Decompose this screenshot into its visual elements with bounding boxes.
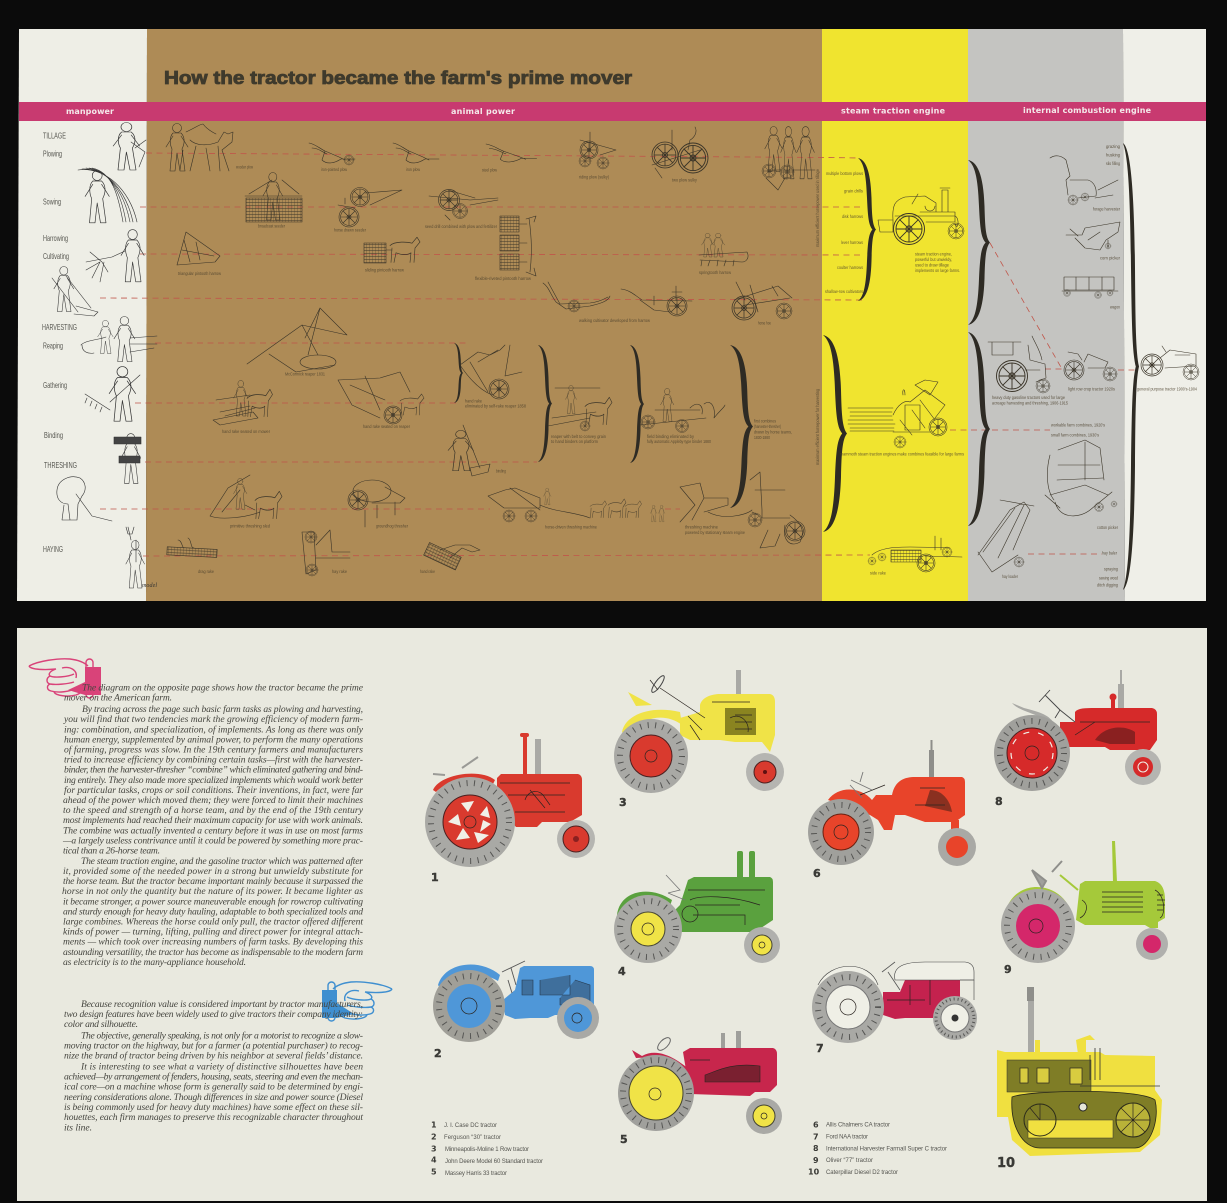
farm task labels: Binding	[44, 430, 63, 440]
row: haying machines	[167, 530, 480, 576]
legend: tractors 1 to 5: J. I. Case DC tractor	[444, 1123, 497, 1129]
steam traction engine	[878, 188, 964, 244]
implement captions: broadcast seeder	[258, 224, 285, 228]
era band	[19, 102, 1206, 121]
text block: diagram explanation: you will find that two tendencies mark the growing efficiency of modern farm-	[63, 714, 363, 725]
implement captions: multiple bottom plows	[826, 171, 864, 176]
farm task labels: HAYING	[43, 544, 63, 554]
legend: tractors 6 to 10: 8	[813, 1144, 819, 1153]
icon: blue pointing hand	[322, 982, 392, 1021]
era label: internal combustion engine: internal combustion engine	[1023, 106, 1152, 115]
text block: diagram explanation: it became stronger, a power source maneuverable enough for rowcrop cultivating	[63, 896, 363, 907]
legend: tractors 1 to 5: John Deere Model 60 Standard tractor	[445, 1159, 543, 1165]
panel: text and tractor page	[17, 628, 1207, 1201]
legend: tractors 1 to 5: Ferguson “30” tractor	[444, 1135, 501, 1141]
gasoline machines	[978, 156, 1199, 572]
implement captions: drawn by horse teams,	[754, 430, 792, 434]
text block: diagram explanation: The combine was actually invented a century before it was in use on most farms	[63, 825, 363, 836]
implement captions: binding	[496, 468, 506, 474]
farm task labels: TILLAGE	[43, 130, 66, 140]
implement captions	[178, 144, 1197, 588]
implement captions: spraying	[1104, 566, 1118, 572]
tractor 3: Minneapolis-Moline	[614, 670, 784, 809]
implement captions: acreage harvesting and threshing, 1906-1915	[992, 400, 1068, 406]
implement captions: mammoth steam traction engines make combines feasible for large farms	[840, 452, 965, 456]
legend: tractors 6 to 10: Caterpillar Diesel D2 tractor	[826, 1170, 898, 1176]
implement captions: horse-driven threshing machine	[545, 524, 597, 530]
text block: diagram explanation: human energy, supplemented by animal power, to perform the many operations	[64, 734, 363, 745]
tractor 10: Caterpillar D2	[997, 987, 1162, 1171]
text block: recognition value: two design features have been widely used to give tractors their company identity:	[64, 1009, 363, 1020]
text block: diagram explanation: large combines. Whereas the horse could only pull, the tractor offered different	[63, 916, 363, 928]
text block: diagram explanation: most implements had reached their maximum capacity for use with work animals.	[63, 815, 363, 826]
legend: tractors 6 to 10: 6	[813, 1120, 819, 1130]
legend: tractors 1 to 5: Massey Harris 33 tractor	[445, 1171, 507, 1177]
implement captions: horse hoe	[758, 320, 771, 326]
implement captions: maximum efficient horsepower for harvesting	[815, 389, 820, 465]
implement captions: hand rake seated on mower	[222, 429, 270, 434]
farm task labels	[42, 130, 77, 554]
implement captions: general purpose tractor 1900's-1904	[1137, 386, 1197, 392]
farm task labels: HARVESTING	[42, 322, 77, 332]
implement captions: implements on large farms.	[915, 268, 960, 273]
implement captions: used to draw tillage	[915, 262, 949, 268]
text block: diagram explanation: the horse team. But the tractor became important mainly because it surpassed the	[63, 876, 364, 887]
text block: recognition value: The objective, generally speaking, is not only for a motorist to recognize a slow-	[81, 1030, 363, 1042]
implement captions: coulter harrows	[837, 265, 864, 270]
text block: recognition value: nize the brand of tractor being driven by his neighbor at several fields’ distance.	[64, 1051, 363, 1062]
implement captions: powerful but unwieldy,	[915, 257, 952, 262]
implement captions: disk harrows	[842, 214, 864, 219]
legend: tractors 6 to 10: 10	[808, 1168, 820, 1176]
text block: diagram explanation: —a largely useless contrivance until it could be powered by something more prac-	[62, 835, 363, 846]
legend: tractors 6 to 10: 7	[813, 1132, 819, 1142]
implement captions: side rake	[870, 570, 886, 576]
text block: diagram explanation: kinds of power — turning, lifting, pulling and direct power for integral attach-	[63, 926, 363, 938]
implement captions: ditch digging	[1097, 582, 1118, 588]
text block: diagram explanation: as electricity is to the many-appliance household.	[63, 957, 246, 968]
farm task labels: Gathering	[43, 380, 67, 390]
column: animal power background	[146, 29, 822, 601]
mammoth combine	[848, 380, 947, 448]
text block: recognition value: color and silhouette.	[64, 1019, 138, 1030]
implement captions: horse drawn seeder	[334, 228, 366, 232]
implement captions: hand rake	[420, 569, 435, 574]
text block: diagram explanation	[62, 682, 364, 968]
number 7: 7	[816, 1042, 824, 1055]
column: internal combustion background	[968, 29, 1125, 601]
implement captions: wagon	[1110, 304, 1120, 310]
legend: tractors 6 to 10: International Harvester Farmall Super C tractor	[826, 1146, 947, 1152]
tractor 8: Farmall Super C	[994, 670, 1161, 808]
page background	[17, 628, 1207, 1201]
text block: diagram explanation: to the speed and strength of a horse team, and by the end of the 19th century	[63, 805, 364, 816]
text block: recognition value: its line.	[64, 1122, 92, 1133]
text block: diagram explanation: binder, then the harvester-thresher “combine” which eliminated gathering and bind-	[64, 765, 363, 776]
implement captions: steam traction engine,	[915, 252, 952, 256]
number 5: 5	[620, 1133, 628, 1146]
implement captions: groundhog thresher	[376, 524, 408, 528]
implement captions: workable farm combines, 1920's	[1051, 422, 1106, 428]
implement captions: walking cultivator developed from harrow	[579, 318, 651, 323]
implement captions: cotton picker	[1097, 525, 1118, 530]
text block: diagram explanation: for particular tasks, crops or soil conditions. Their inventions, in fact, were far	[64, 785, 363, 796]
row: sowing machines	[245, 172, 498, 227]
legend: tractors 6 to 10: Allis Chalmers CA tractor	[826, 1122, 890, 1128]
number 4: 4	[618, 965, 626, 978]
legend: tractors 6 to 10	[808, 1120, 947, 1176]
legend: tractors 1 to 5: 3	[431, 1144, 437, 1154]
farm task labels: THRESHING	[44, 460, 77, 470]
text block: recognition value: is being commonly used for heavy duty machines) have some effect on these sil-	[64, 1102, 363, 1113]
implement captions: small farm combines, 1930's	[1051, 432, 1100, 438]
era label: animal power: animal power	[451, 107, 515, 116]
implement captions: primitive threshing sled	[230, 524, 270, 528]
implement captions: riding plow (sulky)	[579, 174, 609, 180]
tractor 1: J. I. Case DC	[425, 733, 595, 884]
text block: diagram explanation: The steam traction engine, and the gasoline tractor which was patterned after	[81, 856, 363, 867]
text block: diagram explanation: ing entirely. They also made more specialized implements which would work better	[64, 775, 363, 786]
legend: tractors 6 to 10: Oliver “77” tractor	[826, 1158, 873, 1164]
legend: tractors 1 to 5: 1	[431, 1120, 437, 1130]
number 2: 2	[434, 1047, 442, 1060]
farm task labels: Plowing	[43, 148, 62, 158]
column: right margin background	[1123, 29, 1206, 601]
tractor 4: John Deere 60	[614, 851, 780, 978]
farm task labels: Reaping	[43, 340, 63, 350]
implement captions: drag rake	[198, 569, 214, 574]
implement captions: corn picker	[1100, 256, 1120, 260]
text block: recognition value: houettes, each firm manages to preserve this recognizable character throughout	[64, 1112, 363, 1123]
legend: tractors 1 to 5: 2	[431, 1132, 437, 1142]
implement captions: sawing wood	[1099, 576, 1118, 580]
implement captions: forage harvester	[1093, 206, 1120, 212]
implement captions: sliding pintooth harrow	[365, 268, 405, 272]
legend: tractors 6 to 10: 9	[813, 1156, 819, 1165]
number 3: 3	[619, 796, 627, 809]
braces	[454, 143, 1139, 590]
implement captions: springtooth harrow	[699, 270, 732, 275]
side rake	[868, 536, 962, 572]
era label: steam traction engine: steam traction engine	[841, 106, 946, 116]
implement captions: 1830-1880	[754, 435, 770, 440]
implement captions: first combines	[754, 418, 777, 424]
implement captions: steel plow	[482, 168, 497, 172]
number 10: 10	[997, 1156, 1015, 1171]
text block: diagram explanation: By tracing across the page such basic farm tasks as plowing and harvesting,	[82, 704, 363, 715]
implement captions: hay rake	[332, 569, 347, 574]
text block: recognition value	[64, 999, 363, 1133]
text block: diagram explanation: mover on the American farm.	[64, 693, 172, 704]
implement captions: maximum efficient horsepower used in tillage	[815, 169, 820, 247]
implement captions: heavy duty gasoline tractors used for large	[992, 395, 1065, 400]
column: steam traction background	[822, 29, 968, 601]
implement captions: two plow sulky	[672, 178, 698, 182]
text block: recognition value: achieved—by arrangement of fenders, housing, seats, steering and even the mechan-	[64, 1072, 363, 1083]
text block: diagram explanation: of farming, progress was slow. In the 19th century farmers and manufacturers	[64, 744, 363, 756]
text block: diagram explanation: ing: combination, and specialization, of implements. As long as there was only	[64, 724, 364, 735]
implement captions: silo filling	[1106, 161, 1120, 166]
implement captions: (harvester-thresher)	[754, 424, 781, 429]
implement captions: hay loader	[1002, 574, 1018, 579]
farm task labels: Sowing	[43, 196, 61, 206]
implement captions: iron plow	[406, 167, 421, 172]
title: How the tractor became the farm's prime mover	[164, 67, 632, 88]
text block: diagram explanation: horse in not only the quantity but the nature of its power. It became lighter as	[62, 886, 363, 897]
text block: recognition value: moving tractor on the highway, but for a farmer (a potential purchaser) to recog-	[64, 1041, 363, 1052]
panel: foldout diagram	[17, 29, 1206, 601]
text block: diagram explanation: tried to increase efficiency by combining certain tasks—first with the harvester-	[64, 755, 363, 766]
legend: tractors 6 to 10: Ford NAA tractor	[826, 1134, 868, 1140]
text block: diagram explanation: astounding versatility, the tractor has become as indispensable to the modern farm	[63, 947, 363, 958]
implement captions: to hand binders on platform	[551, 439, 598, 444]
tractor 6: Allis Chalmers CA	[808, 740, 976, 880]
row: plowing machines	[166, 124, 815, 190]
implement captions: husking	[1106, 152, 1120, 158]
implement captions: eliminated by self-rake reaper 1858	[465, 404, 526, 408]
implement captions: hay baler	[1102, 550, 1117, 556]
text block: diagram explanation: The diagram on the opposite page shows how the tractor became the prime	[82, 682, 364, 694]
implement captions: wooden plow	[236, 164, 253, 170]
implement captions: triangular pintooth harrow	[178, 271, 222, 276]
implement captions: seed drill combined with plow and fertilizer	[425, 224, 497, 229]
legend: tractors 1 to 5: 5	[431, 1168, 437, 1176]
text block: recognition value: neering considerations alone. Though differences in size and power source (Diesel	[64, 1092, 363, 1103]
row: threshing machines	[210, 472, 805, 548]
row: reaping machines	[213, 308, 725, 476]
implement captions: threshing machine	[685, 524, 718, 530]
implement captions: grain drills	[844, 188, 864, 194]
task flow dashed lines	[100, 153, 1138, 556]
text block: diagram explanation: tical than a 26-horse team.	[63, 846, 160, 856]
icon: pink pointing hand	[29, 659, 101, 698]
legend: tractors 1 to 5: Minneapolis-Moline 1 Row tractor	[445, 1147, 529, 1153]
tractor 7: Ford NAA	[812, 962, 977, 1055]
signature: model	[142, 583, 157, 589]
implement captions: hand rake	[465, 398, 482, 404]
column: manpower background	[17, 29, 147, 601]
legend: tractors 1 to 5	[431, 1120, 543, 1177]
implement captions: hand rake seated on reaper	[363, 424, 410, 429]
number 6: 6	[813, 867, 821, 880]
text block: diagram explanation: ments — which took over increasing numbers of farm tasks. By developing this	[63, 937, 363, 948]
farm task labels: Cultivating	[43, 251, 69, 261]
implement captions: iron-pointed plow	[321, 167, 347, 172]
implement captions: light row crop tractor 1920s	[1068, 386, 1116, 392]
text block: recognition value: Because recognition value is considered important by tractor manufacturers,	[81, 999, 363, 1010]
row: harrowing machines	[177, 216, 748, 276]
implement captions: McCormick reaper 1831	[285, 372, 325, 376]
implement captions: flexible-riveted pintooth harrow	[475, 276, 532, 281]
implement captions: powered by stationary steam engine	[685, 530, 745, 535]
farm task labels: Harrowing	[43, 233, 68, 243]
tractor 2: Ferguson 30	[433, 961, 599, 1060]
number 1: 1	[431, 871, 439, 884]
figure: manpower workers	[52, 122, 157, 588]
text block: recognition value: ical core—on a machine whose form is generally said to be determined by engi-	[64, 1082, 363, 1093]
text block: diagram explanation: ahead of the power which moved them; they were forced to limit their machines	[63, 795, 363, 806]
number 8: 8	[995, 795, 1003, 808]
row: cultivating machines	[543, 282, 792, 320]
era label: manpower: manpower	[66, 107, 114, 116]
legend: tractors 1 to 5: 4	[431, 1156, 437, 1164]
text block: recognition value: It is interesting to see what a variety of distinctive silhouettes have been	[80, 1062, 363, 1072]
implement captions: shallow-row cultivators	[825, 289, 864, 294]
implement captions: lever harrows	[841, 240, 864, 245]
tractor 5: Massey Harris 33	[618, 1031, 782, 1146]
implement captions: reaper with belt to convey grain	[551, 434, 606, 439]
implement captions: field binding eliminated by	[647, 434, 695, 439]
text block: diagram explanation: and sturdy enough for heavy duty hauling, adaptable to both specialized tools and	[63, 906, 363, 917]
number 9: 9	[1004, 963, 1012, 976]
implement captions: fully automatic Appleby-type binder 1880	[647, 439, 711, 444]
tractor 9: Oliver 77	[1001, 841, 1168, 976]
implement captions: grazing	[1106, 144, 1120, 149]
text block: diagram explanation: it, provided some of the needed power in a strong but unwieldy substitute for	[63, 866, 363, 877]
